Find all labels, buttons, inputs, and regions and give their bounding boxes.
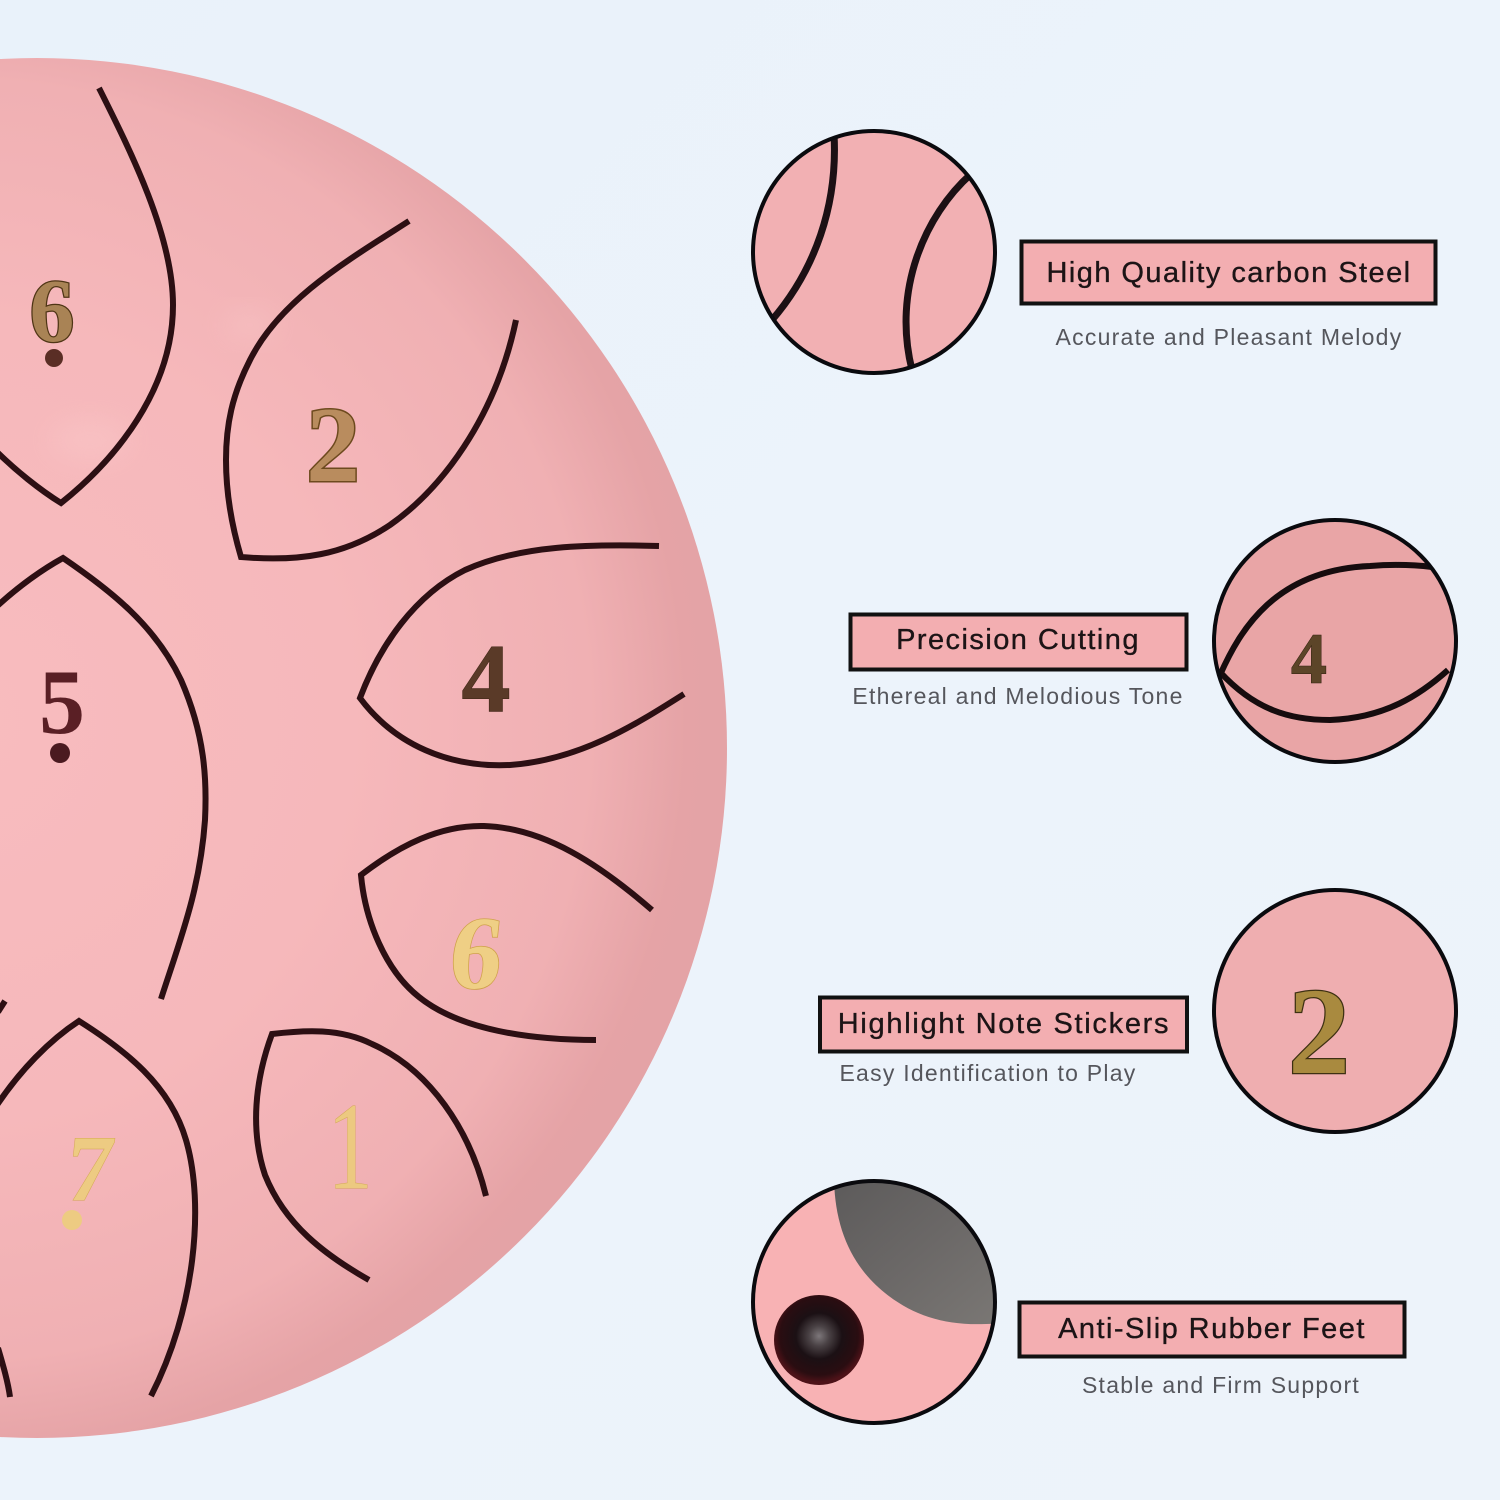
- label: Anti-Slip Rubber Feet: Anti-Slip Rubber Feet: [1058, 1313, 1366, 1345]
- label: Anti-Slip Rubber Feet: [1020, 1302, 1404, 1356]
- tongue: 1 gold: 1: [328, 1079, 372, 1216]
- label: High Quality carbon Steel: High Quality carbon Steel: [1046, 257, 1412, 289]
- subtext: Accurate and Pleasant Melody: Accurate and Pleasant Melody: [1056, 324, 1402, 350]
- callout circle: carbon steel detail: [753, 131, 995, 373]
- subtext: Easy Identification to Play: Easy Identification to Play: [839, 1060, 1137, 1086]
- callout circle: precision cutting detail: 4: [1291, 619, 1327, 699]
- tongue: 6 with dot (top): [0, 88, 173, 503]
- label: Highlight Note Stickers: Highlight Note Stickers: [838, 1008, 1170, 1040]
- tongue: 7 gold: 7: [61, 1117, 119, 1221]
- label: Highlight Note Stickers: [820, 998, 1187, 1052]
- label: Precision Cutting: Precision Cutting: [896, 624, 1140, 656]
- tongue: 4: 4: [462, 625, 510, 733]
- tongue: 4: [360, 545, 684, 765]
- tongue: 7 gold: [0, 1021, 195, 1396]
- subtext: Ethereal and Melodious Tone: Ethereal and Melodious Tone: [852, 683, 1184, 709]
- subtext: Stable and Firm Support: Stable and Firm Support: [1082, 1372, 1360, 1398]
- callout circle: note sticker detail: 2: [1288, 963, 1350, 1100]
- callout circle: precision cutting detail: [1214, 520, 1456, 762]
- tongue: 1 gold: [256, 1031, 486, 1280]
- tongue: 6 gold: [361, 826, 652, 1040]
- callout circle: note sticker detail: [1214, 890, 1456, 1132]
- tongue: 6 with dot (top): 6: [30, 262, 74, 361]
- tongue: 6 gold: 6: [445, 895, 509, 1011]
- tongue: 2: [226, 221, 516, 558]
- tongue: 2: 2: [306, 386, 360, 505]
- label: Precision Cutting: [850, 614, 1186, 670]
- tongue: 5 with dot: 5: [39, 651, 85, 753]
- label: High Quality carbon Steel: [1022, 242, 1436, 304]
- tongue drum: [0, 58, 727, 1438]
- tongue: 5 with dot: [0, 558, 206, 999]
- callout circle: rubber feet detail: [753, 1175, 1010, 1423]
